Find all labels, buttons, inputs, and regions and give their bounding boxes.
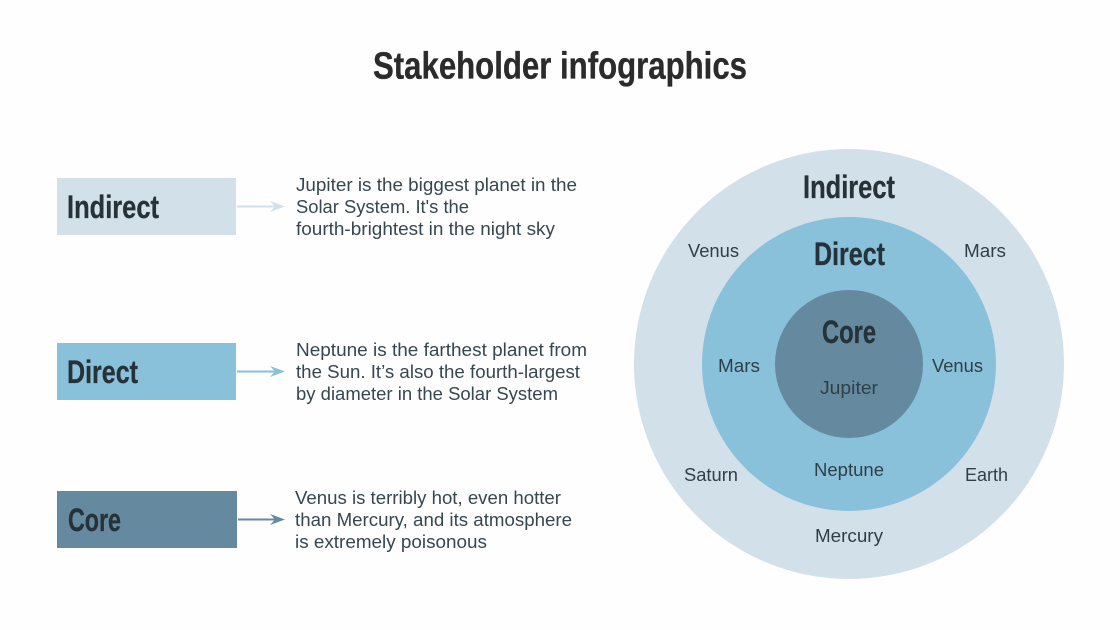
title: Stakeholder infographics xyxy=(373,46,747,88)
indirect description: Jupiter is the biggest planet in the xyxy=(296,175,577,195)
core description xyxy=(295,488,572,552)
outer ring: indirect: Venus xyxy=(688,241,739,261)
core description: is extremely poisonous xyxy=(295,532,487,552)
outer ring: indirect: Saturn xyxy=(684,465,738,485)
direct description: the Sun. It’s also the fourth-largest xyxy=(296,362,580,382)
arrow: indirect xyxy=(237,201,285,212)
direct label box: Direct xyxy=(67,354,138,390)
inner circle: core: Core xyxy=(822,314,876,350)
direct label box xyxy=(57,343,236,400)
outer ring: indirect: Mercury xyxy=(815,526,883,546)
arrow: direct xyxy=(237,366,285,377)
middle ring: direct: Mars xyxy=(718,356,760,376)
middle ring: direct xyxy=(702,217,996,511)
direct description: by diameter in the Solar System xyxy=(296,384,558,404)
outer ring: indirect: Indirect xyxy=(803,169,895,205)
middle ring: direct: Neptune xyxy=(814,460,884,480)
inner circle: core: Jupiter xyxy=(820,378,878,398)
indirect description: fourth-brightest in the night sky xyxy=(296,219,555,239)
outer ring: indirect xyxy=(634,149,1064,579)
panel: core row xyxy=(57,488,572,552)
indirect label box xyxy=(57,178,236,235)
chart: concentric stakeholder circles xyxy=(634,149,1064,579)
outer ring: indirect: Earth xyxy=(965,465,1008,485)
indirect description: Solar System. It's the xyxy=(296,197,469,217)
indirect description xyxy=(296,175,577,239)
core description: Venus is terribly hot, even hotter xyxy=(295,488,561,508)
outer ring: indirect: Mars xyxy=(964,241,1006,261)
inner circle: core xyxy=(775,290,923,438)
core description: than Mercury, and its atmosphere xyxy=(295,510,572,530)
direct description xyxy=(296,340,587,404)
arrow: core xyxy=(238,514,285,525)
direct description: Neptune is the farthest planet from xyxy=(296,340,587,360)
panel: direct row xyxy=(57,340,587,404)
indirect label box: Indirect xyxy=(67,189,159,225)
middle ring: direct: Venus xyxy=(932,356,983,376)
panel: indirect row xyxy=(57,175,577,239)
core label box xyxy=(57,491,237,548)
core label box: Core xyxy=(68,502,121,538)
middle ring: direct: Direct xyxy=(814,236,885,272)
